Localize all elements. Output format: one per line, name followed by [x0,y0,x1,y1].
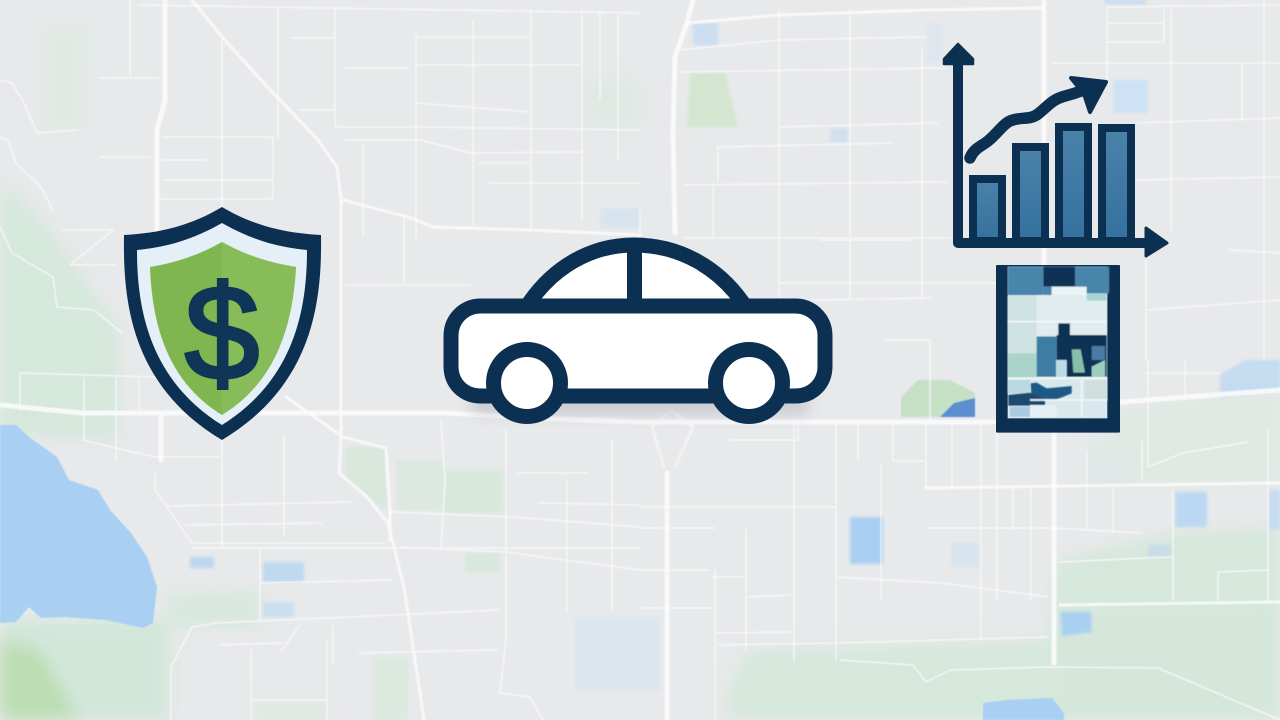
icon: rising bar chart [944,44,1167,256]
trend arrowhead [1071,78,1106,112]
bars [973,127,1131,241]
map tiles [1008,267,1109,417]
icon: location heat map [996,265,1120,433]
rear wheel [716,350,782,416]
lakes and pond [0,380,1064,720]
front wheel [494,350,560,416]
dollar sign: $ [185,259,259,408]
car shadow [470,396,810,414]
car roof and windows [527,245,745,306]
y axis arrowhead [944,44,973,64]
x axis arrowhead [1146,228,1167,256]
window pillar [627,245,642,306]
trend arrow [970,87,1092,158]
car body [451,306,825,396]
icon: car [451,245,825,416]
chart axes [958,60,1150,243]
pale water blocks [575,617,660,690]
icon: shield with dollar sign [124,207,321,440]
